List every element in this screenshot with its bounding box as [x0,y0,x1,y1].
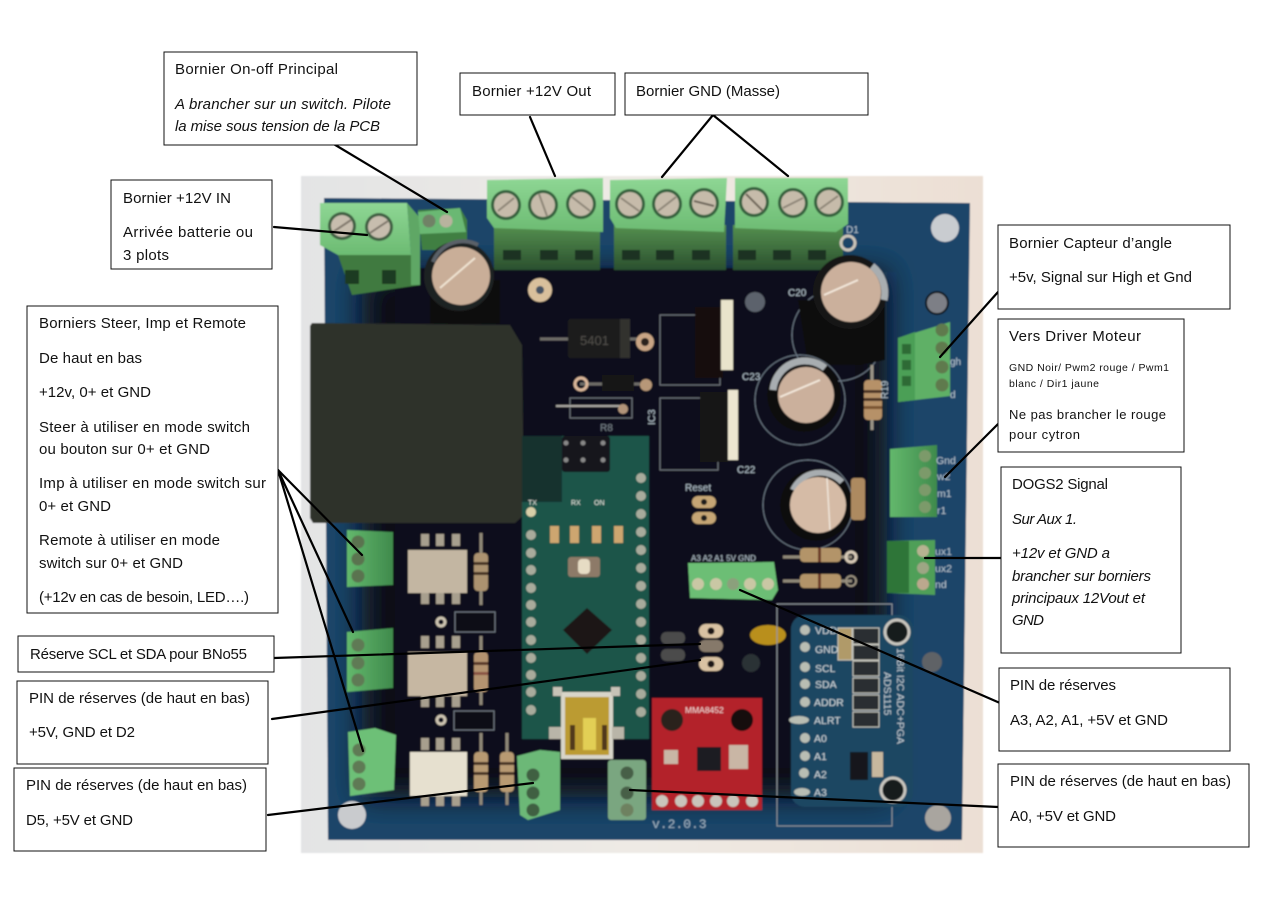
capacitor C20 [788,225,887,381]
terminal block: Aux: ux2 [935,563,952,575]
callout: PIN de réserves A0: A0, +5V et GND [1010,808,1116,825]
callout: PIN de réserves +5V, GND et D2 [17,681,268,764]
callout: Bornier On-off Principal: Bornier On-off Principal [175,61,338,78]
callout: Bornier +12V IN: 3 plots [123,247,169,264]
callout: Bornier Capteur d'angle [998,225,1230,309]
pin labels: GND [815,644,839,656]
callout: PIN de réserves A3, A2, A1: A3, A2, A1, +5V et GND [1010,712,1168,729]
pin labels: ADDR [814,697,844,709]
terminal block: +12V out [487,178,603,270]
terminal block: D5 [517,750,560,820]
callout: Borniers Steer, Imp et Remote: De haut en bas [39,350,142,367]
callout: Bornier +12V IN [111,180,272,269]
callout: Vers Driver Moteur: pour cytron [1009,427,1080,442]
photo of the PCB [301,176,983,853]
terminal block: angle sensor: d [950,390,956,401]
callout: Bornier On-off Principal: A brancher sur un switch. Pilote [174,96,391,113]
terminal block: on-off [418,208,467,250]
callout: PIN de réserves D5, +5V et GND: PIN de réserves (de haut en bas) [26,777,247,794]
resistors row [474,533,514,805]
terminal block: Aux [887,540,952,595]
callout: Bornier Capteur d'angle: Bornier Capteur d’angle [1009,235,1172,252]
jumper pads [661,624,760,672]
voltage regulators: IC3 [647,409,658,425]
Arduino Nano board: RX [571,500,581,507]
terminal block: angle sensor [898,322,961,402]
red accelerometer board [652,698,762,810]
resistor R19: R19 [880,380,891,399]
callout: PIN de réserves D5, +5V et GND: D5, +5V et GND [26,812,133,829]
pin labels: VDD [815,625,838,637]
callout: Borniers Steer, Imp et Remote: Imp à utiliser en mode switch sur [39,475,266,492]
photo background [301,176,983,853]
diodes: R8 [600,423,613,434]
mounting holes [338,214,959,831]
blue circuit board [324,198,970,840]
callout: Bornier +12V IN: Bornier +12V IN [123,190,231,207]
callout: PIN de réserves A3, A2, A1: PIN de réserves [1010,677,1116,694]
capacitor C22: C22 [737,465,756,476]
callout: Vers Driver Moteur: blanc / Dir1 jaune [1009,378,1099,390]
capacitor C23: C23 [742,372,761,383]
reset pads: Reset [685,483,711,494]
terminal block: A3 A2 A1 +5V GND [688,554,778,600]
callout: Réserve SCL et SDA: Réserve SCL et SDA pour BNo55 [30,646,247,663]
diodes [540,319,650,434]
resistor R19 [864,365,891,430]
terminal block: angle sensor: gh [950,357,961,368]
capacitor C22 [737,460,865,550]
callout: PIN de réserves A3, A2, A1 [999,668,1230,751]
capacitor C23 [742,355,845,445]
callout: DOGS2 Signal: Sur Aux 1. [1012,511,1077,528]
pin rows [526,473,646,717]
capacitor C20: C20 [788,288,807,299]
terminal block: motor driver [890,445,956,517]
red accelerometer board: MMA8452 [685,705,724,715]
terminal block: motor driver: w2 [936,471,951,483]
callout: Vers Driver Moteur: Ne pas brancher le rouge [1009,407,1166,422]
LEDs [550,526,623,543]
callout: DOGS2 Signal: DOGS2 Signal [1012,476,1108,493]
ADS1115 ADC board: ADS1115 [881,672,893,716]
callout: Bornier On-off Principal: la mise sous tension de la PCB [175,118,380,135]
callout: PIN de réserves A0: PIN de réserves (de haut en bas) [1010,773,1231,790]
terminal block: motor driver: Gnd [936,455,956,467]
callout: DOGS2 Signal: brancher sur borniers [1012,568,1152,585]
callout: DOGS2 Signal: +12v et GND a [1012,545,1110,562]
yellow capacitor [750,625,786,645]
callout: PIN de réserves D5, +5V et GND [14,768,266,851]
Arduino Nano board [522,436,649,739]
capacitor C20: D1 [846,225,859,236]
ADS1115 ADC board [777,604,913,826]
terminal block: A3 A2 A1 +5V GND: A3 A2 A1 5V GND [691,554,756,563]
callout: DOGS2 Signal: principaux 12Vout et [1011,590,1146,607]
leader lines [268,115,1003,815]
microcontroller chip [563,608,612,654]
callout: Borniers Steer, Imp et Remote: 0+ et GND [39,498,111,515]
callout: Borniers Steer, Imp et Remote: Steer à utiliser en mode switch [39,419,250,436]
callout: PIN de réserves +5V, GND et D2: +5V, GND et D2 [29,724,135,741]
USB connector [549,687,624,759]
callout: Bornier +12V Out [460,73,615,115]
pin labels [814,625,844,799]
callout: PIN de réserves A0 [998,764,1249,847]
terminal block: +12V in [320,203,420,295]
diodes: 5401 [580,333,609,348]
callout: PIN de réserves +5V, GND et D2: PIN de réserves (de haut en bas) [29,690,250,707]
dark centre of the board [362,272,887,797]
Arduino Nano board: ON [594,500,604,507]
pin labels: SDA [815,679,837,691]
SMD parts [838,628,879,727]
pin labels: A3 [814,787,827,799]
callout: Borniers Steer, Imp et Remote: ou bouton sur 0+ et GND [39,441,210,458]
terminal block: Aux: ux1 [935,546,952,558]
callout: Borniers Steer, Imp et Remote: switch sur 0+ et GND [39,555,183,572]
pin labels: A1 [814,751,827,763]
callout: Vers Driver Moteur: GND Noir/ Pwm2 rouge / Pwm1 [1009,362,1169,374]
callout: Bornier Capteur d'angle: +5v, Signal sur High et Gnd [1009,269,1192,286]
terminal block: Aux: nd [935,579,947,591]
terminal block: Steer [347,530,393,587]
header pins [562,436,610,472]
callout: Borniers Steer, Imp et Remote: +12v, 0+ et GND [39,384,151,401]
terminal block: motor driver: r1 [937,505,946,517]
callout: Bornier +12V Out: Bornier +12V Out [472,83,592,100]
voltage regulators [636,300,738,470]
pin labels: ALRT [814,715,841,727]
callout: Borniers Steer, Imp et Remote: Remote à utiliser en mode [39,532,220,549]
callout: Vers Driver Moteur [998,319,1184,452]
capacitor near inlet [424,241,500,324]
terminal block: Remote [348,728,396,796]
callout: Bornier On-off Principal [164,52,417,145]
ADS1115 ADC board: 16Bit I2C ADC+PGA [894,648,906,744]
resistors R10 R11 [783,548,856,588]
callout: DOGS2 Signal: GND [1012,612,1044,629]
callout: Bornier +12V IN: Arrivée batterie ou [123,224,253,241]
Arduino Nano board: TX [528,500,537,507]
callout: Vers Driver Moteur: Vers Driver Moteur [1009,328,1141,345]
terminal block: GND 1 [610,178,727,270]
callout: Bornier GND: Bornier GND (Masse) [636,83,780,100]
callout: Borniers Steer, Imp et Remote: (+12v en cas de besoin, LED….) [39,589,249,606]
pin labels: A2 [814,769,827,781]
optocouplers [408,534,495,806]
callout: Borniers Steer, Imp et Remote: Borniers Steer, Imp et Remote [39,315,246,332]
pin labels: SCL [815,663,836,675]
callout: Borniers Steer, Imp et Remote [27,306,278,613]
callout: Réserve SCL et SDA [18,636,274,672]
version label: v.2.0.3 [652,817,707,832]
terminal block: Imp [347,628,393,692]
callout: Bornier GND [625,73,868,115]
pin labels: A0 [814,733,827,745]
terminal block: GND 2 [733,178,848,270]
callout: DOGS2 Signal [1001,467,1181,653]
transformer block [310,323,524,523]
pin pads [789,625,810,796]
terminal block: motor driver: m1 [937,488,952,500]
terminal block: A0 [608,760,646,820]
reset pads [685,483,716,524]
reset button [568,557,600,577]
